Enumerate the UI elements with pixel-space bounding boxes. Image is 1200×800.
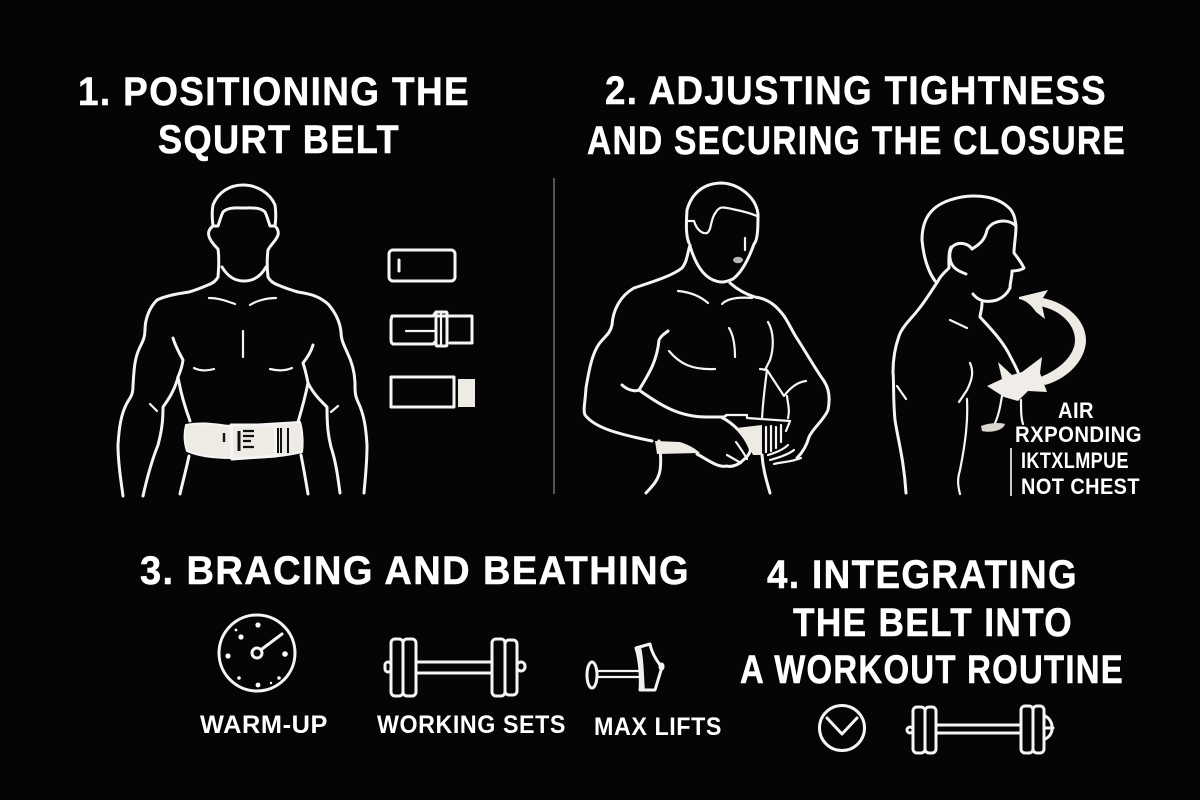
icon: check circle <box>820 706 864 750</box>
icon: belt variants <box>389 250 475 407</box>
text: air expanding callout: IKTXLMPUE <box>1021 448 1129 473</box>
figure: front torso wearing belt <box>118 185 367 496</box>
labels: training stages: WARM-UP <box>200 711 328 739</box>
icon: gauge <box>219 615 295 691</box>
heading: step 4: A WORKOUT ROUTINE <box>740 648 1124 692</box>
text: air expanding callout: AIR <box>1058 398 1094 423</box>
text: air expanding callout <box>1015 398 1142 499</box>
belt <box>185 422 303 459</box>
labels: training stages: MAX LIFTS <box>594 713 722 741</box>
icon: barbell <box>385 639 525 696</box>
heading: step 4: THE BELT INTO <box>793 601 1073 645</box>
heading: step 2 <box>587 69 1126 163</box>
figure: side profile breathing <box>893 196 1142 499</box>
text: air expanding callout: NOT CHEST <box>1021 474 1140 499</box>
heading: step 3: 3. BRACING AND BEATHING <box>140 549 690 593</box>
text: air expanding callout: RXPONDING <box>1015 422 1142 447</box>
labels: training stages <box>200 711 722 741</box>
heading: step 4 <box>740 553 1124 692</box>
heading: step 1 <box>78 70 470 162</box>
icon: burst <box>987 357 1047 401</box>
heading: step 4: 4. INTEGRATING <box>767 553 1078 597</box>
icon: small barbell <box>587 644 663 690</box>
icon: barbell <box>907 706 1053 753</box>
belt <box>655 441 700 454</box>
heading: step 1: 1. POSITIONING THE <box>78 70 470 114</box>
heading: step 1: SQURT BELT <box>158 118 400 162</box>
labels: training stages: WORKING SETS <box>377 711 566 739</box>
heading: step 2: 2. ADJUSTING TIGHTNESS <box>605 69 1107 113</box>
arrow: air circulating <box>1019 290 1086 385</box>
figure: torso tightening belt <box>584 183 829 493</box>
divider <box>553 178 555 494</box>
